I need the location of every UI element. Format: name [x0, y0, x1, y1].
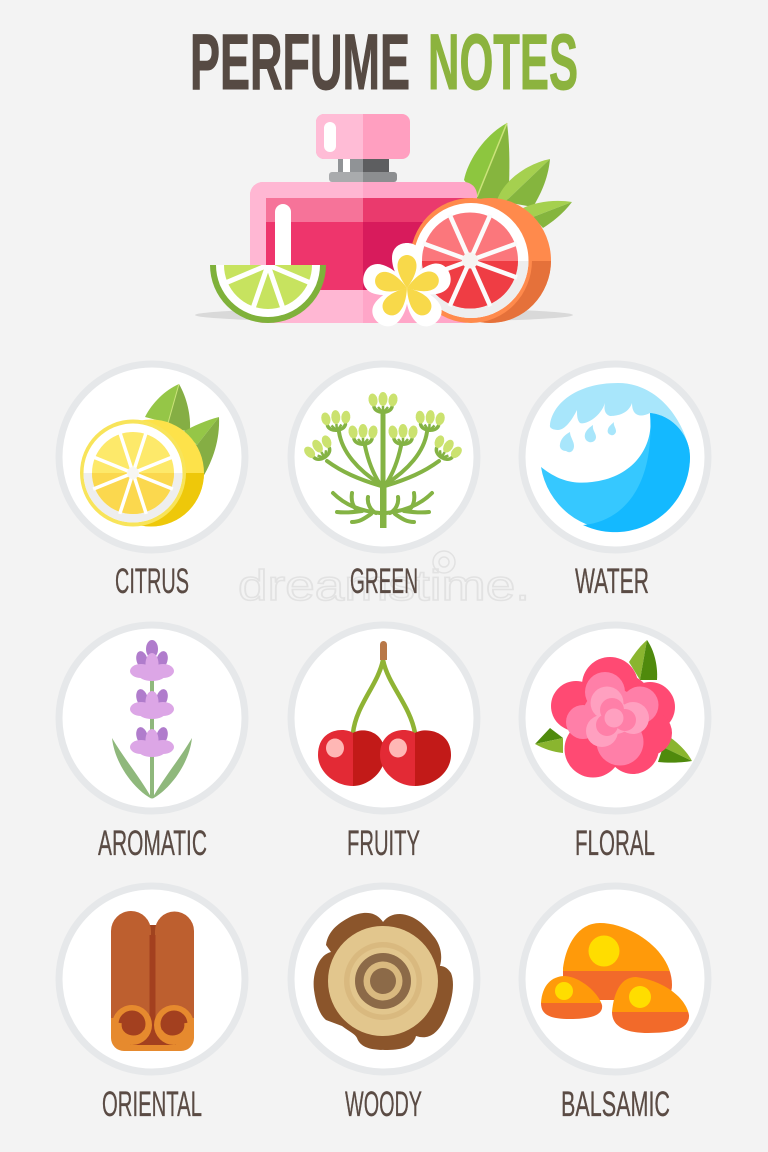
watermark: dreamstime. — [238, 562, 530, 610]
badge — [291, 625, 477, 811]
panel: balsamic — [522, 886, 708, 1124]
badge — [59, 886, 245, 1072]
icon: balsam resin stones — [541, 923, 690, 1033]
label: BALSAMIC — [561, 1085, 670, 1124]
icon: wood log — [314, 913, 453, 1050]
watermark — [238, 551, 530, 610]
shadow — [195, 308, 573, 322]
icon: rose — [535, 640, 692, 778]
panel: woody — [291, 886, 477, 1124]
panel: fruity — [291, 625, 477, 863]
icon: cinnamon — [111, 911, 194, 1051]
cap — [316, 114, 410, 159]
badge — [522, 364, 708, 550]
icon: lavender — [112, 640, 192, 799]
icon: lemon — [80, 384, 219, 526]
panel: oriental — [59, 886, 245, 1124]
lime wedge — [210, 265, 326, 323]
badge — [522, 886, 708, 1072]
badge — [59, 364, 245, 550]
grapefruit — [410, 198, 551, 323]
label: CITRUS — [115, 562, 189, 601]
label: WOODY — [345, 1085, 422, 1124]
panel: citrus — [59, 364, 245, 601]
label: WATER — [575, 562, 649, 601]
panel: green — [291, 364, 477, 601]
hero: perfume bottle with citrus — [195, 114, 573, 332]
badge — [59, 625, 245, 811]
icon: fennel plant — [301, 392, 465, 528]
panel: aromatic — [59, 625, 245, 863]
leaves — [464, 123, 572, 228]
badge — [522, 625, 708, 811]
label: AROMATIC — [98, 824, 207, 863]
label: FRUITY — [347, 824, 420, 863]
badge — [291, 886, 477, 1072]
badge — [291, 364, 477, 550]
label: FLORAL — [575, 824, 655, 863]
title: PERFUME — [190, 17, 410, 106]
label: GREEN — [350, 562, 418, 601]
title: NOTES — [428, 17, 578, 106]
panel: water — [522, 364, 708, 601]
label: ORIENTAL — [102, 1085, 202, 1124]
icon: cherries — [318, 641, 451, 786]
icon: wave — [541, 383, 690, 532]
plumeria flower — [360, 243, 454, 332]
panel: floral — [522, 625, 708, 863]
bottle — [250, 182, 477, 323]
neck and collar — [329, 159, 397, 182]
